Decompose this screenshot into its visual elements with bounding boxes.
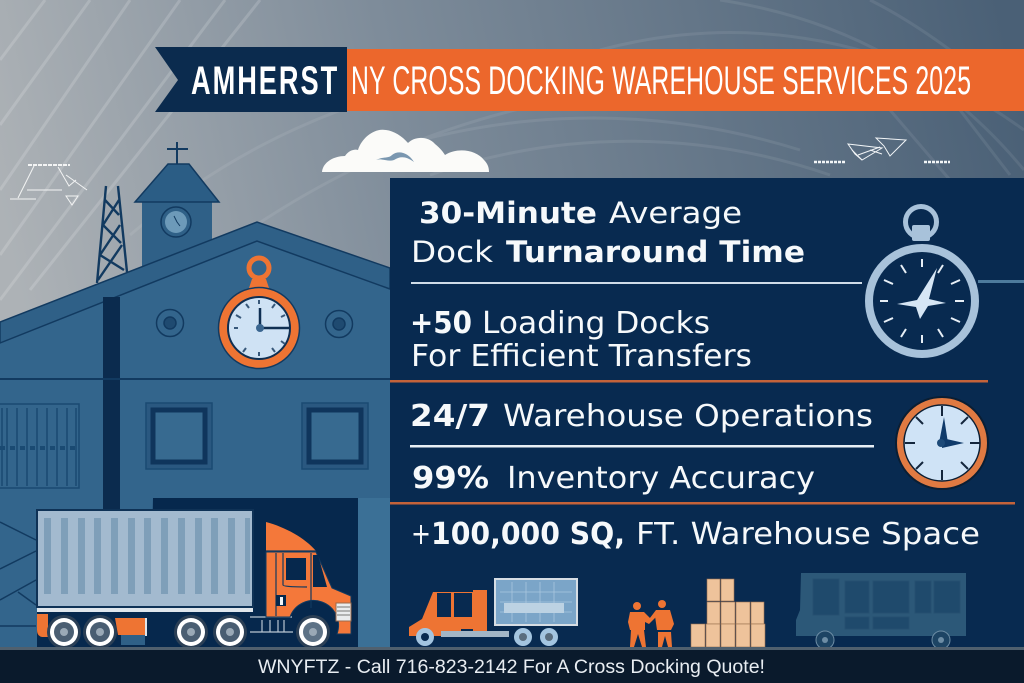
semi truck: [37, 510, 351, 649]
stat: 100,000 sq ft: [411, 517, 980, 552]
stat: 30-minute turnaround: Turnaround Time: [506, 235, 805, 269]
trailer underframe: [37, 614, 147, 637]
stat: 30-minute turnaround: Average: [609, 196, 742, 230]
stat: 100,000 sq ft: FT. Warehouse Space: [636, 517, 980, 552]
stat: 30-minute turnaround: [411, 196, 805, 269]
icon: two workers: [628, 600, 674, 647]
footer bar: [0, 647, 1024, 683]
divider: [411, 282, 862, 284]
icon: paper planes: [814, 138, 950, 162]
underframe shadow: [37, 612, 153, 648]
icon: cloud: [322, 130, 489, 172]
stat: 100,000 sq ft: 100,000 SQ,: [431, 517, 625, 552]
tower cross: [167, 142, 188, 164]
round vents: [156, 310, 352, 338]
divider: [410, 445, 874, 448]
lattice tower: [97, 186, 127, 283]
stat: +50 loading docks: For Efficient Transfers: [411, 339, 752, 374]
side bracing: [0, 522, 36, 626]
right window: [302, 403, 368, 469]
stat: 30-minute turnaround: Dock: [411, 235, 493, 269]
trailer box: [37, 510, 253, 607]
cab: [266, 522, 316, 551]
left vent window: [0, 404, 79, 488]
tower roof: [135, 164, 219, 202]
clock hands: [260, 308, 290, 328]
banner: orange bar: [347, 49, 1024, 111]
warehouse building: [0, 222, 390, 648]
icon: sketch lines at left: [10, 165, 87, 205]
tower body: [142, 202, 212, 272]
lower right wall edge: [358, 498, 390, 648]
clock ticks: [234, 300, 285, 356]
stat: 99% inventory accuracy: Inventory Accuracy: [507, 461, 815, 496]
icon: orange clock: [896, 397, 988, 489]
cab door lines: [266, 551, 316, 616]
stat: 24/7 operations: Warehouse Operations: [503, 399, 873, 434]
stat: 99% inventory accuracy: 99%: [412, 461, 489, 496]
cab window: [286, 558, 306, 580]
trailer sill: [37, 608, 253, 612]
stat: +50 loading docks: +50: [410, 306, 472, 341]
clock tower: [135, 142, 219, 272]
tower clock: [161, 207, 191, 237]
icon: box van: [796, 573, 966, 649]
orange divider: [390, 502, 1015, 504]
centre window: [146, 403, 212, 469]
title: Amherst: AMHERST: [191, 59, 337, 103]
footer text: WNYFTZ - Call 716-823-2142 For A Cross Docking Quote!: [258, 657, 765, 678]
orange divider: [390, 380, 988, 382]
floor line: [0, 378, 390, 380]
stat: +50 loading docks: [410, 306, 752, 374]
stats panel: [390, 178, 1024, 648]
icon: stopwatch: [869, 206, 1024, 354]
banner: navy tag: [155, 47, 347, 112]
stat: +50 loading docks: Loading Docks: [482, 306, 710, 341]
clock loop: [249, 258, 269, 278]
title: rest: NY CROSS DOCKING WAREHOUSE SERVICES 2025: [351, 59, 971, 104]
clock case: [218, 288, 300, 368]
grille: [336, 603, 351, 621]
orange wall clock: [218, 258, 300, 368]
title banner: [155, 47, 1024, 112]
wall: [0, 241, 390, 648]
trailer ribs: [44, 518, 250, 594]
icon: small delivery truck: [409, 579, 577, 646]
dock door: [150, 498, 358, 648]
wheels: [47, 615, 330, 649]
icon: stacked boxes: [691, 579, 765, 647]
stat: 100,000 sq ft: +: [411, 517, 431, 552]
roof band: [0, 222, 390, 343]
stat: 30-minute turnaround: 30-Minute: [419, 196, 597, 230]
stat: 24/7 operations: 24/7: [410, 399, 490, 434]
dark pillar: [103, 297, 120, 509]
